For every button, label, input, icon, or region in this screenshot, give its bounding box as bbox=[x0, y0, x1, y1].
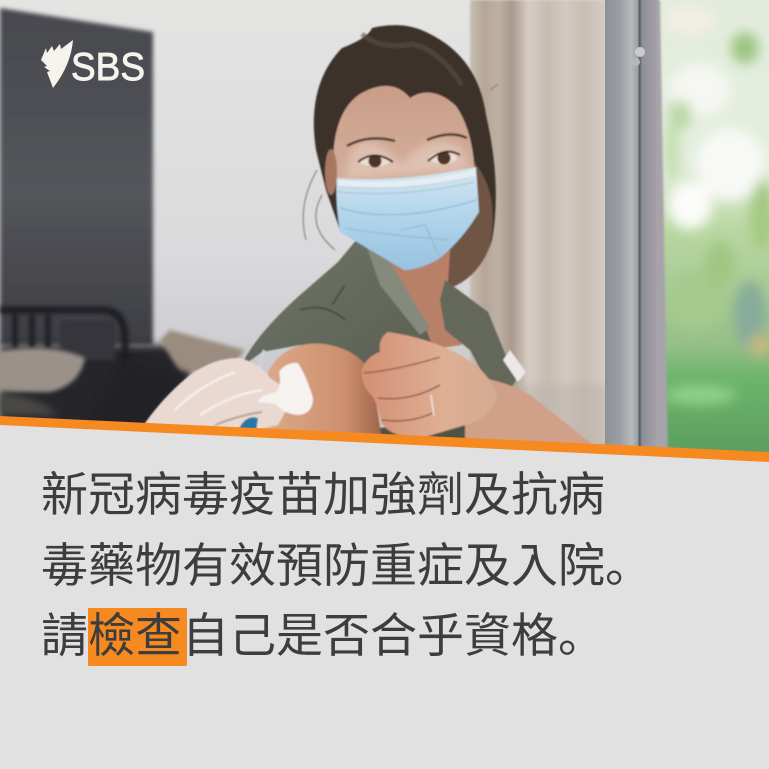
curtain lower fade bbox=[525, 386, 605, 444]
curtain bbox=[470, 0, 610, 460]
garden view bbox=[655, 0, 769, 460]
hair back bbox=[303, 25, 498, 288]
eyebrows bbox=[347, 138, 395, 146]
text line 2: 毒藥物有效預防重症及入院。 bbox=[41, 527, 652, 596]
logo mark bbox=[41, 40, 73, 88]
shirt bbox=[240, 233, 526, 445]
background room bbox=[0, 0, 480, 460]
text line 1: 新冠病毒疫苗加強劑及抗病 bbox=[41, 468, 605, 521]
photo: woman in mask showing vaccinated arm bbox=[0, 0, 769, 462]
window frame bbox=[605, 0, 668, 460]
message text bbox=[41, 468, 652, 666]
text line 3: 請檢查自己是否合乎資格。 bbox=[41, 597, 605, 666]
sleeve strap bbox=[261, 349, 266, 353]
highlight box behind 檢查 bbox=[88, 608, 187, 666]
face bbox=[324, 84, 476, 196]
gloved hand holding cotton pad bbox=[145, 358, 313, 432]
orange diagonal band bbox=[0, 416, 769, 462]
logo wordmark: SBS bbox=[71, 46, 145, 89]
left ear bbox=[325, 149, 337, 195]
neck bbox=[385, 250, 462, 350]
face mask bbox=[336, 167, 479, 270]
hand pinching sleeve and forearm bbox=[362, 332, 592, 445]
SBS logo bbox=[41, 40, 145, 89]
vaccinated upper arm bbox=[262, 344, 382, 440]
eyes bbox=[360, 156, 390, 166]
